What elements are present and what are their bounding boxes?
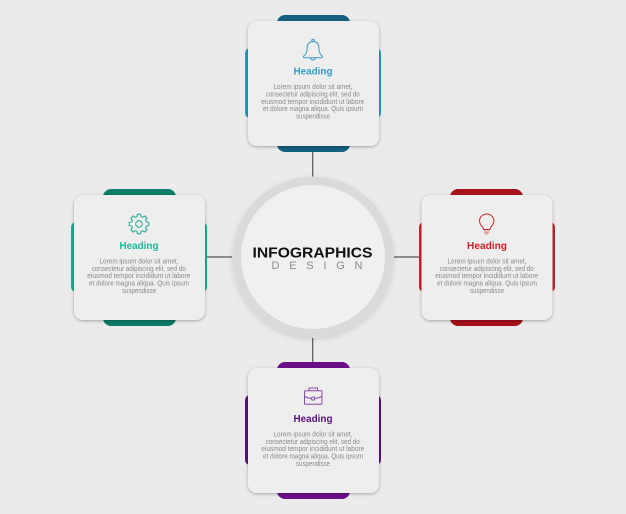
body text: et dolore magna aliqua. Quis ipsum	[263, 106, 363, 113]
heading: Heading	[294, 66, 332, 78]
body text	[435, 258, 538, 295]
body text: eiusmod tempor incididunt ut labore	[435, 273, 538, 280]
body text	[261, 432, 364, 468]
connector lines	[206, 150, 420, 364]
icon: light bulb	[480, 214, 494, 234]
body text: consectetur adipiscing elit, sed do	[92, 266, 186, 273]
body text: eiusmod tempor incididunt ut labore	[261, 446, 364, 453]
body text: et dolore magna aliqua. Quis ipsum	[263, 454, 363, 460]
heading: Heading	[120, 240, 158, 252]
icon: bell	[303, 39, 323, 60]
panel: top card	[245, 15, 381, 152]
body text: Lorem ipsum dolor sit amet,	[448, 258, 527, 266]
body text: consectetur adipiscing elit, sed do	[266, 92, 360, 98]
body text: suspendisse	[122, 288, 156, 295]
body text: suspendisse	[296, 114, 330, 121]
body text: eiusmod tempor incididunt ut labore	[87, 273, 190, 280]
icon: gear	[129, 214, 149, 234]
body text: consectetur adipiscing elit, sed do	[440, 266, 534, 273]
body text: Lorem ipsum dolor sit amet,	[274, 84, 353, 91]
panel: bottom card	[245, 362, 381, 499]
panel: left card	[71, 189, 207, 326]
body text: et dolore magna aliqua. Quis ipsum	[437, 280, 537, 288]
center circle	[232, 176, 394, 338]
body text: Lorem ipsum dolor sit amet,	[274, 432, 353, 438]
center title: INFOGRAPHICS	[252, 244, 372, 262]
body text	[87, 258, 190, 295]
body text: suspendisse	[296, 461, 330, 468]
icon: briefcase	[304, 388, 322, 404]
body text: suspendisse	[470, 288, 504, 295]
body text	[261, 84, 364, 121]
body text: Lorem ipsum dolor sit amet,	[100, 258, 179, 266]
body text: eiusmod tempor incididunt ut labore	[261, 99, 364, 106]
heading: Heading	[467, 240, 507, 252]
heading: Heading	[294, 413, 332, 425]
body text: et dolore magna aliqua. Quis ipsum	[89, 280, 189, 288]
center subtitle: DESIGN	[272, 260, 363, 272]
body text: consectetur adipiscing elit, sed do	[266, 439, 360, 446]
panel: right card	[419, 189, 555, 326]
